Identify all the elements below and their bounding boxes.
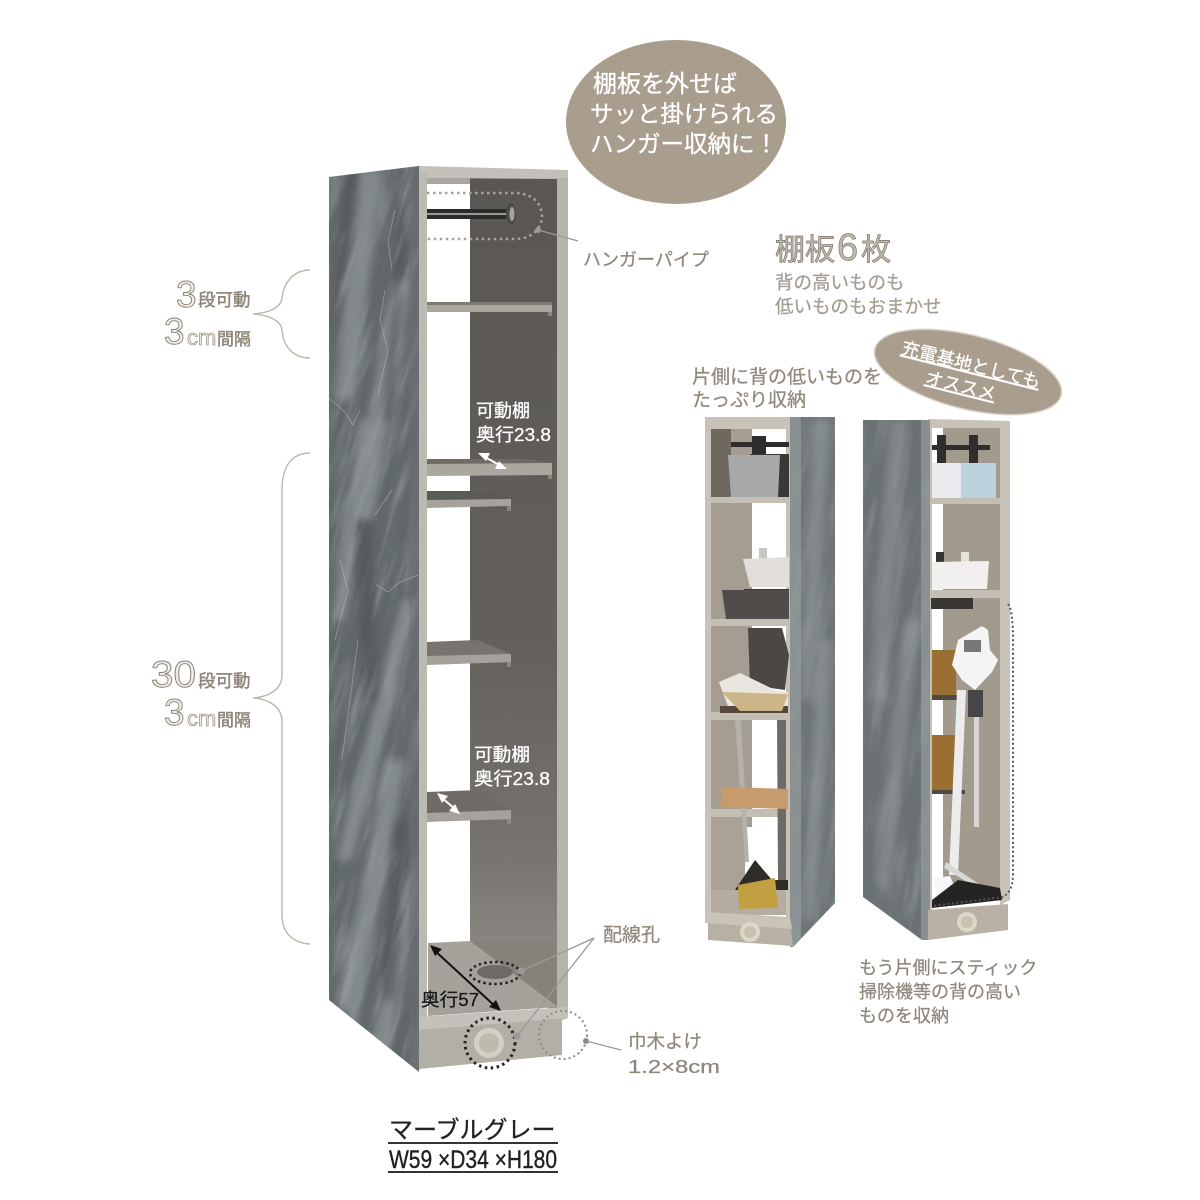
callout: hanger storage bubble <box>566 40 786 204</box>
leader: hanger pipe <box>535 227 578 241</box>
shelf 4 <box>427 640 511 667</box>
product name: W59 ×D34 ×H180 <box>389 1146 557 1174</box>
label: 30 steps <box>151 654 251 733</box>
label: 30 steps: cm <box>187 706 216 731</box>
label: shelf depth lower <box>474 745 550 789</box>
hanger bottles <box>932 435 990 463</box>
text: right unit caption: 掃除機等の背の高い <box>859 982 1021 1002</box>
depth arrow: upper shelf <box>478 453 507 469</box>
brace: lower adjustment <box>253 453 310 944</box>
text: right unit caption: ものを収納 <box>859 1006 949 1026</box>
marble side <box>863 420 930 940</box>
white caddy <box>743 548 789 587</box>
text: left unit caption <box>692 366 882 411</box>
cabinet back panel <box>470 178 558 948</box>
shelf 2 <box>427 459 552 479</box>
upper hanger and bottles <box>731 436 789 464</box>
floor <box>428 941 558 1016</box>
shelves <box>931 498 1000 598</box>
label: 3 steps: 3 <box>164 311 185 352</box>
callout: charging base: 充電基地としても <box>899 338 1043 392</box>
text: shelves description <box>775 272 942 317</box>
brace: upper adjustment <box>253 270 310 358</box>
heading: six shelves: 棚板6枚 <box>775 227 891 269</box>
text: left unit caption: たっぷり収納 <box>692 389 806 411</box>
callout: hanger storage bubble: ハンガー収納に！ <box>590 131 778 157</box>
main cabinet illustration <box>329 166 588 1072</box>
label: 3 steps: 3 <box>176 274 197 315</box>
callout: charging base: オススメ <box>923 368 998 405</box>
label: 30 steps: 3 <box>164 692 185 733</box>
depth arrow: 57 <box>430 945 501 1011</box>
label: 30 steps: 間隔 <box>217 711 251 730</box>
base and plinth <box>708 918 793 946</box>
label: baseboard: 巾木よけ <box>628 1031 702 1052</box>
wiring hole on plinth <box>465 1018 515 1068</box>
text: left unit caption: 片側に背の低いものを <box>692 366 882 388</box>
label: 3 steps: 間隔 <box>217 330 251 349</box>
back panel <box>711 427 752 827</box>
product name <box>388 1117 558 1174</box>
cabinet frame top and posts <box>419 166 568 179</box>
label: baseboard: 1.2×8cm <box>628 1056 720 1077</box>
label: shelf depth upper <box>476 401 551 445</box>
plinth <box>419 1007 568 1069</box>
label: shelf depth upper: 奥行23.8 <box>476 425 551 445</box>
leader: wiring holes <box>514 938 594 1039</box>
outlet <box>957 912 977 932</box>
label: baseboard <box>628 1031 720 1077</box>
dotted hanger outline <box>427 193 542 239</box>
product name: マーブルグレー <box>389 1117 556 1144</box>
base and plinth <box>928 904 1008 940</box>
white vacuum <box>932 626 1002 908</box>
text: shelves description: 背の高いものも <box>775 272 905 293</box>
left unit photo <box>705 417 835 947</box>
dark caddy <box>722 589 789 619</box>
floor items <box>735 860 788 909</box>
shelf 1 <box>427 302 552 316</box>
label: 3 steps: 段可動 <box>198 290 250 310</box>
frame <box>928 419 1010 905</box>
frame <box>705 417 790 923</box>
wiring hole on floor <box>470 962 520 984</box>
back panel <box>943 428 1001 898</box>
label: 30 steps: 30 <box>151 654 196 695</box>
right unit photo <box>863 419 1014 940</box>
label: 3 steps: cm <box>187 325 216 350</box>
shelf 3 <box>427 491 511 511</box>
storage boxes <box>932 463 996 498</box>
leader: baseboard <box>583 1038 621 1050</box>
label: shelf depth lower: 奥行23.8 <box>474 769 550 789</box>
label: shelf depth lower: 可動棚 <box>474 745 530 765</box>
outlet <box>740 922 760 942</box>
callout: hanger storage bubble: 棚板を外せば <box>593 71 737 98</box>
label: wiring holes: 配線孔 <box>603 924 660 946</box>
label: shelf depth upper: 可動棚 <box>476 401 530 421</box>
label: depth 57: 奥行57 <box>421 990 479 1010</box>
text: right unit caption: もう片側にスティック <box>859 958 1037 978</box>
text: right unit caption <box>859 958 1037 1026</box>
shelves <box>711 497 789 817</box>
basket and cloth <box>719 673 788 713</box>
marble side panel <box>329 166 419 1072</box>
grey basket <box>728 454 789 497</box>
label: 3 steps <box>164 274 251 352</box>
label: 30 steps: 段可動 <box>198 671 250 691</box>
vacuum in shelf <box>748 628 789 690</box>
baseboard cutout circle <box>539 1011 587 1059</box>
hanger pipe <box>427 203 516 225</box>
wicker baskets <box>932 650 965 794</box>
vacuum poles <box>735 720 786 880</box>
label: hanger pipe: ハンガーパイプ <box>583 250 709 270</box>
cutting board <box>720 787 788 809</box>
shelf 5 <box>427 790 511 824</box>
under-shelf dark <box>931 598 973 609</box>
text: shelves description: 低いものもおまかせ <box>775 296 942 317</box>
marble side <box>790 417 835 947</box>
callout: charging base <box>866 313 1070 431</box>
white caddy <box>932 552 989 589</box>
callout: hanger storage bubble: サッと掛けられる <box>590 101 778 127</box>
depth arrow: lower shelf <box>437 793 460 814</box>
dotted line <box>932 604 1013 906</box>
